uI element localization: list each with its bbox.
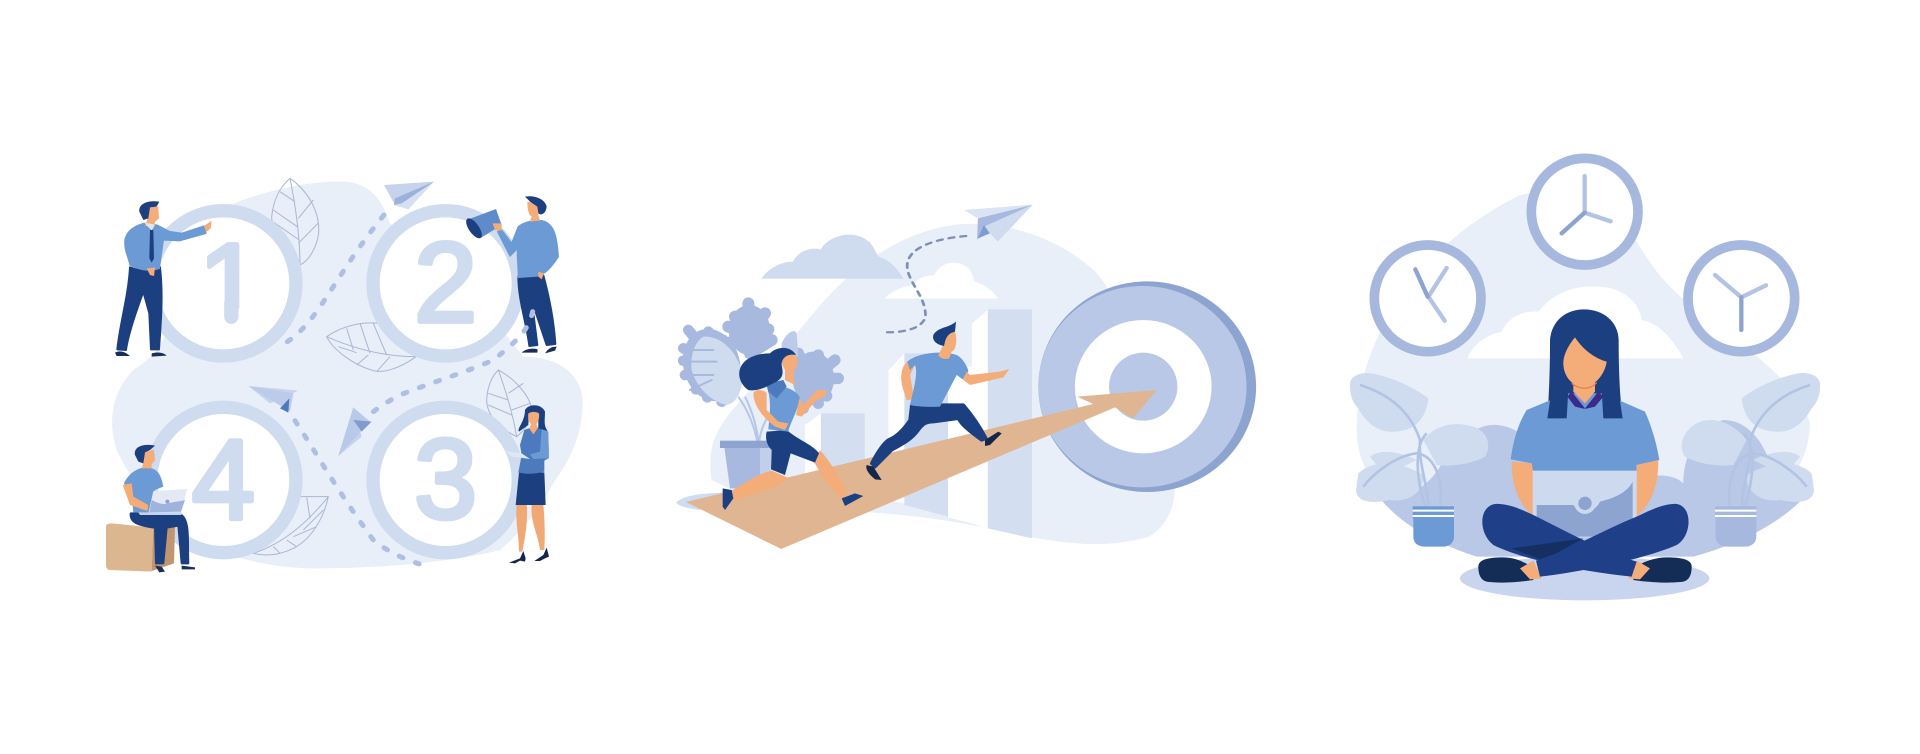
person: woman running <box>723 348 863 510</box>
circle 2 <box>373 211 518 356</box>
background blob <box>710 224 1175 544</box>
growth arrow <box>686 390 1157 549</box>
cloud grey-blue <box>761 235 903 279</box>
number 2: 2 <box>414 219 477 346</box>
clock right <box>1688 245 1795 352</box>
leaf right <box>487 370 532 437</box>
circle 4 <box>151 407 296 553</box>
panel: time management <box>1350 158 1820 600</box>
illustration canvas <box>106 154 1820 600</box>
leaf centre <box>327 323 416 372</box>
person: man pointing <box>115 201 212 357</box>
potted plant <box>675 303 838 488</box>
number 1 <box>207 242 240 324</box>
person: man with megaphone <box>463 196 558 353</box>
foreground hills <box>1380 420 1800 557</box>
target <box>1038 281 1256 492</box>
leaf top left <box>272 178 319 265</box>
plant right <box>1682 373 1820 547</box>
person: woman with laptop <box>1478 309 1692 583</box>
background blob <box>112 181 583 568</box>
person: woman with tablet <box>505 405 549 563</box>
shadow under arrow <box>676 493 724 510</box>
paper plane left <box>248 386 298 413</box>
number 1: 1 <box>198 221 262 348</box>
panel: numbered steps <box>106 178 583 572</box>
dashed flight path <box>883 236 966 332</box>
dashed path 1 to 2 <box>287 212 387 342</box>
leaf bottom <box>253 497 328 555</box>
paper plane <box>964 205 1033 242</box>
panel: running to target <box>675 205 1256 549</box>
person: man running <box>866 322 1009 480</box>
bar chart <box>805 309 1032 538</box>
person: man with laptop <box>123 445 195 572</box>
box seat <box>106 523 175 572</box>
number 3: 3 <box>414 416 477 543</box>
ground ellipse <box>1460 556 1709 600</box>
cloud white <box>885 263 998 299</box>
circle 1 <box>151 211 296 356</box>
circle 3 <box>373 407 518 553</box>
cloud <box>1468 287 1683 358</box>
dashed path 3 to 4 <box>295 421 421 564</box>
clock left <box>1374 245 1481 352</box>
paper plane top <box>384 182 434 209</box>
clock centre <box>1531 158 1638 265</box>
plant left <box>1350 373 1488 547</box>
dashed path 2 to 3 <box>373 312 533 412</box>
number 4: 4 <box>192 417 255 544</box>
background blob <box>1357 183 1810 553</box>
paper plane right <box>338 407 372 456</box>
